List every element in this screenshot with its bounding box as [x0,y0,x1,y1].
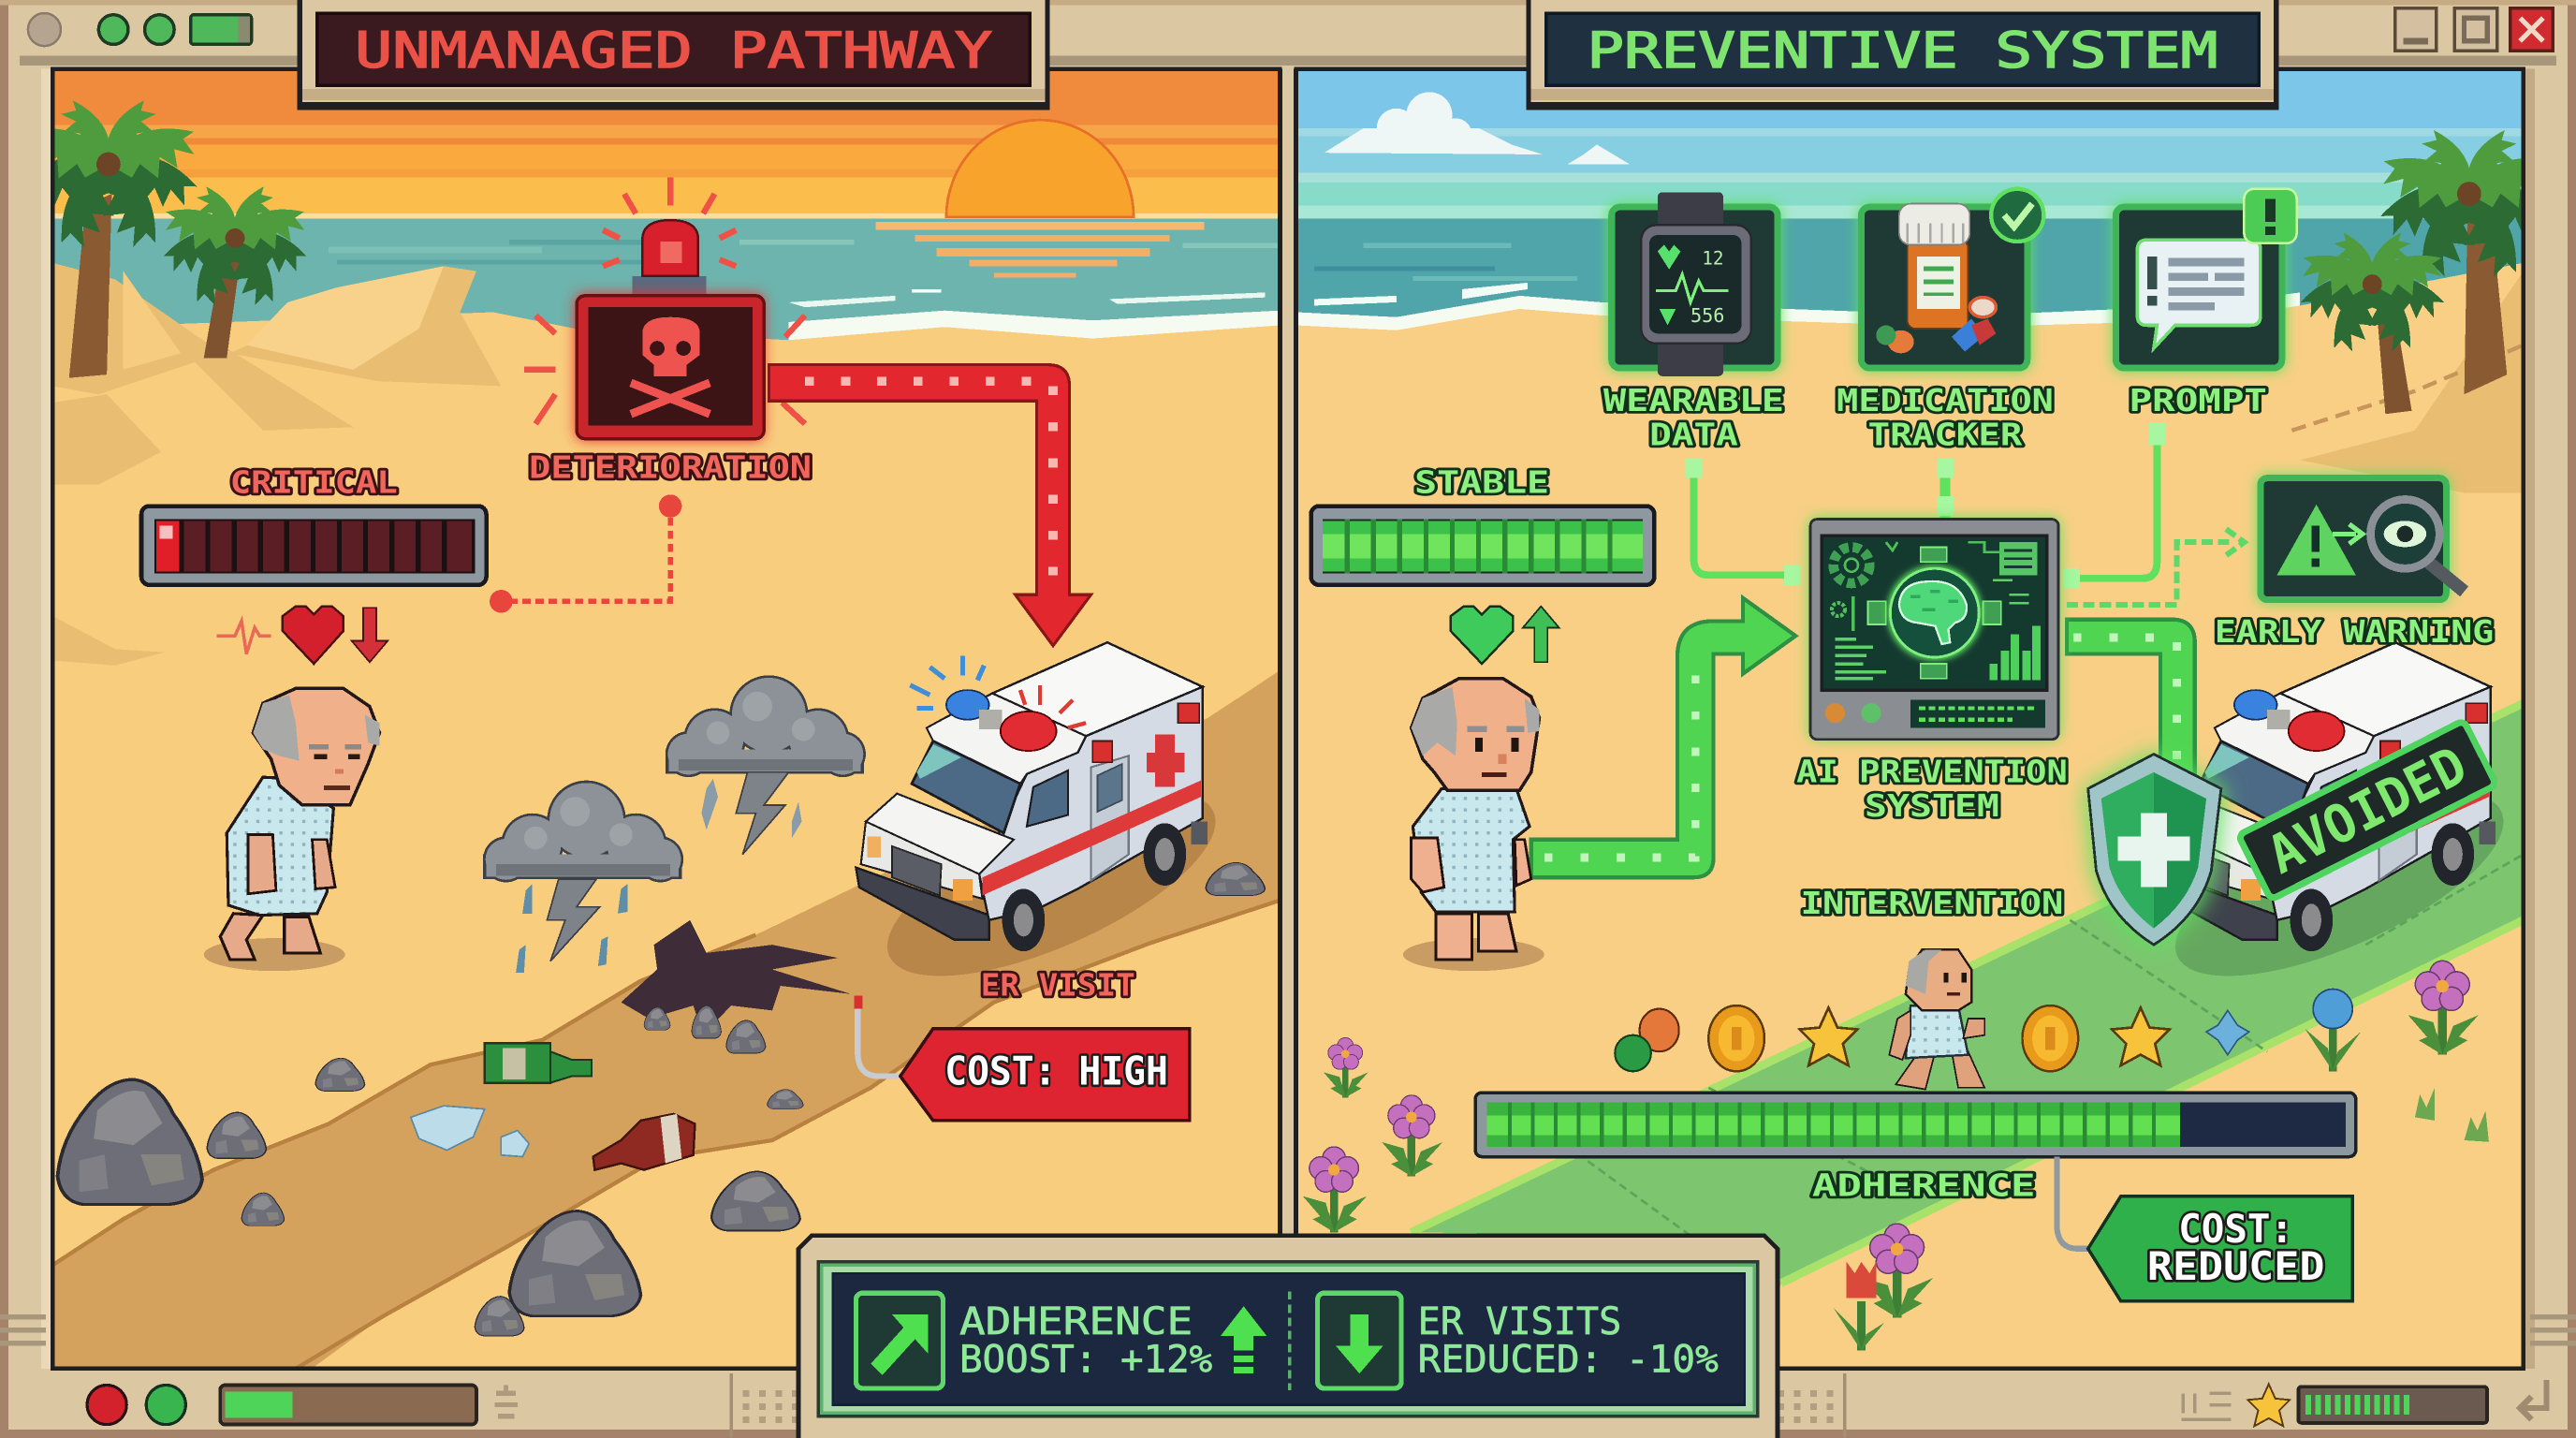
dunes [52,263,501,666]
connector: wearable [1690,477,1784,579]
label: er visit: ER VISIT [981,967,1135,1004]
connector: prompt [2080,446,2160,582]
bottom bar vents [729,1373,1847,1438]
label: wearable data: DATA [1649,417,1738,453]
rocks [57,862,1265,1336]
title plate: unmanaged pathway: UNMANAGED PATHWAY [355,22,992,80]
storm cloud upper [666,675,866,855]
flowers [1303,961,2489,1351]
beach sand [52,312,1280,1380]
title plate: preventive system [1526,0,2278,110]
ambulance [2191,642,2496,951]
dashed early warning link [2067,529,2244,605]
icon: wearable data [1608,192,1781,376]
icon: wearable data: 12 [1702,248,1724,270]
stat: er visits reduced: ER VISITS [1418,1299,1621,1343]
connector nodes [1686,422,2165,588]
clouds [1325,92,1630,165]
path ruts [52,901,1280,1369]
cost high tag [855,996,1190,1121]
icon: healthy heart with up arrow [1451,607,1559,664]
icon: down arrow [1318,1293,1401,1388]
stable health bar [1311,506,1654,585]
icon: adherence arrow [856,1293,943,1388]
label: medication tracker: TRACKER [1868,417,2024,453]
dirt path [52,670,1280,1380]
icon: early warning [2257,475,2465,603]
label: ai prevention system: SYSTEM [1865,787,1999,824]
connector: medication [1942,463,1948,520]
dune [2300,271,2524,493]
ambulance shadow [887,801,1215,976]
label: ai prevention system: AI PREVENTION [1796,753,2068,789]
cost reduced tag [2056,1157,2352,1301]
bottom bar left controls [87,1385,518,1425]
label: deterioration: DETERIORATION [529,449,812,486]
critical health bar [141,506,487,585]
AI prevention system console [1808,518,2060,740]
label: stable: STABLE [1414,464,1549,501]
label: prompt: PROMPT [2130,382,2267,418]
palm trees [54,101,306,378]
panel: preventive system scene [1296,69,2562,1380]
green arrow to AI system [1531,598,1795,877]
ambulance shadow [2175,801,2503,976]
label: intervention: INTERVENTION [1801,885,2063,921]
title plate: unmanaged pathway [298,0,1050,110]
adherence progress bar [1475,1093,2356,1157]
glass shards [411,1106,529,1157]
rewards row [1615,1005,2249,1071]
patient: walking [1889,949,1984,1090]
cost reduced tag: COST: [2178,1206,2293,1252]
green bottle [485,1043,592,1083]
top bar status icons [28,13,252,46]
label: medication tracker: MEDICATION [1837,382,2054,418]
label: medication tracker [1837,382,2054,453]
stat: er visits reduced: REDUCED: -10% [1418,1337,1719,1381]
window buttons [2395,8,2553,51]
sea [1296,218,2524,333]
panel: results dashboard [798,1236,1778,1438]
deterioration alert [524,178,812,486]
icon: failing heart with down arrow [217,607,388,664]
shield [2085,751,2224,948]
crack in the ground [622,920,850,1019]
stat: adherence boost: ADHERENCE [959,1299,1193,1343]
palm trees [2301,130,2522,414]
panel: unmanaged pathway scene [16,69,1280,1380]
sand marks [2291,345,2524,431]
dotted line from health bar to deterioration [490,494,681,613]
icon: skull warning box [575,294,764,440]
icon: siren light [633,220,707,298]
label: critical: CRITICAL [230,464,398,501]
dotted divider [1289,1291,1291,1390]
icon: up arrow [1221,1306,1266,1373]
scene divider [1278,69,1298,1369]
red bottle [593,1114,695,1170]
stat: er visits reduced [1418,1299,1719,1381]
icon: medication tracker [1858,189,2043,372]
cost high tag: COST: HIGH [944,1048,1168,1093]
green path to shield [2067,620,2195,781]
safe green road [1410,700,2522,1286]
patient: stable [1403,679,1544,971]
blue sky [1296,69,2524,220]
storm cloud lower [483,781,683,973]
beach sand [1296,263,2524,1380]
sunset sky [52,69,1280,220]
stat: adherence boost: BOOST: +12% [959,1337,1212,1381]
sun [946,120,1134,217]
label: ai prevention system [1796,753,2068,824]
icon: wearable data: 556 [1690,304,1724,327]
cost reduced tag: REDUCED [2147,1243,2324,1289]
AVOIDED stamp: AVOIDED [2259,735,2477,887]
icon: siren rays [524,178,805,424]
label: wearable data [1603,382,1784,453]
label: early warning: EARLY WARNING [2215,613,2494,650]
bottom bar right controls [2182,1380,2546,1426]
stat: adherence boost [959,1299,1212,1381]
patient: declining [204,688,379,971]
red arrow to ER [768,365,1090,646]
label: adherence: ADHERENCE [1812,1167,2036,1204]
sea [52,218,1280,342]
ambulance [856,642,1208,951]
title plate: preventive system: PREVENTIVE SYSTEM [1587,22,2217,80]
icon: prompt [2113,189,2297,372]
label: wearable data: WEARABLE [1603,382,1784,418]
